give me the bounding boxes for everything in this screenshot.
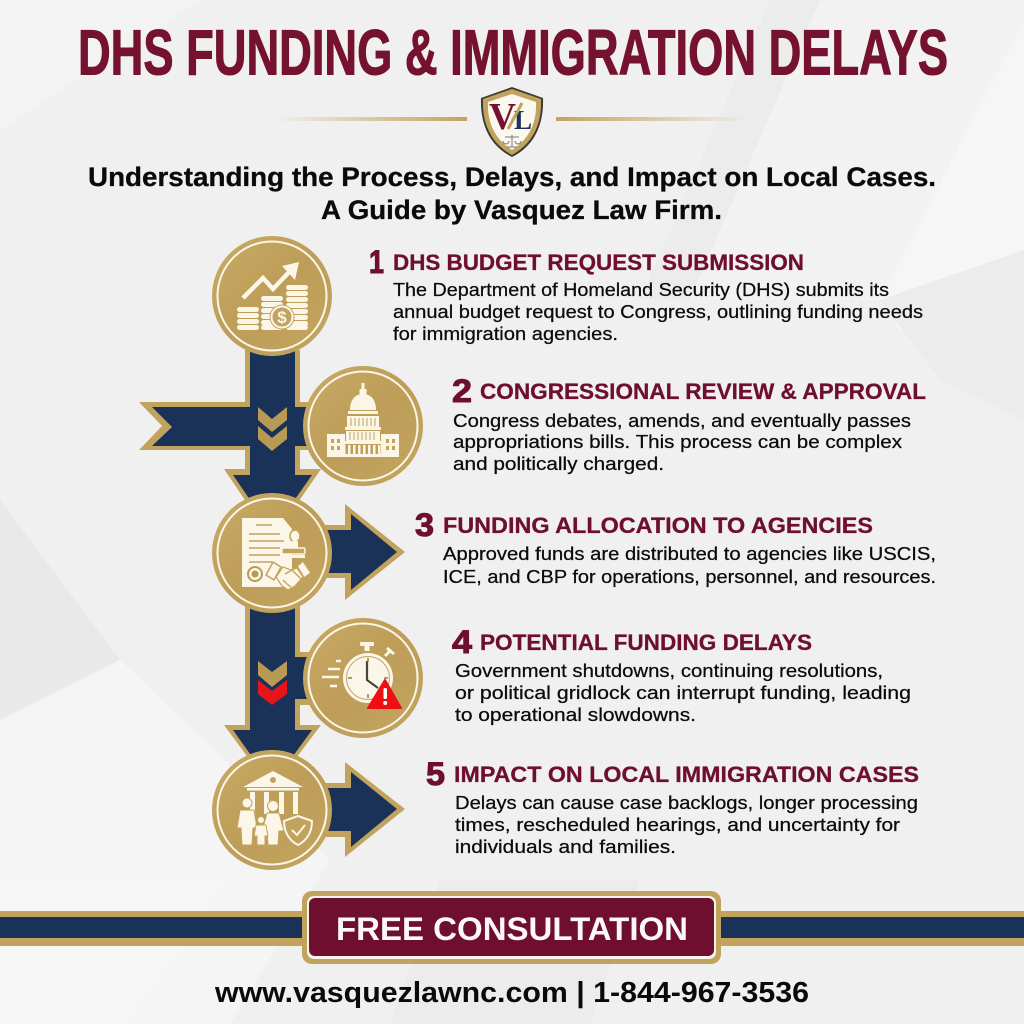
step 3: FUNDING ALLOCATION TO AGENCIES (443, 513, 873, 538)
step 4: 4 (452, 624, 472, 660)
step 5: Delays can cause case backlogs, longer processing (455, 792, 918, 813)
step 2: CONGRESSIONAL REVIEW & APPROVAL (480, 379, 926, 404)
logo divider with shield (272, 87, 750, 157)
footer band (0, 911, 1024, 946)
step 5: times, rescheduled hearings, and uncertainty for (455, 814, 900, 835)
step 5 (426, 756, 919, 857)
subtitle (88, 162, 936, 225)
step 5: 5 (426, 756, 445, 792)
step 4: Government shutdowns, continuing resolutions, (455, 660, 883, 681)
step 3: ICE, and CBP for operations, personnel, and resources. (443, 566, 936, 587)
step 3 (415, 507, 936, 587)
step 3: 3 (415, 507, 434, 543)
icon: courthouse, family and shield (212, 750, 332, 870)
subtitle: Understanding the Process, Delays, and Impact on Local Cases. (88, 162, 936, 192)
step 5: individuals and families. (455, 836, 676, 857)
step 4: POTENTIAL FUNDING DELAYS (480, 630, 812, 655)
step 4: or political gridlock can interrupt funding, leading (455, 682, 911, 703)
contact line: www.vasquezlawnc.com | 1-844-967-3536 (214, 977, 809, 1009)
arrow: step 3 (320, 504, 405, 600)
step 2: Congress debates, amends, and eventually passes (453, 410, 911, 431)
arrow: upper flow with ribbon (139, 350, 321, 540)
step 2: and politically charged. (453, 453, 664, 474)
step 1: 1 (369, 244, 384, 280)
step 4: to operational slowdowns. (455, 704, 696, 725)
subtitle: A Guide by Vasquez Law Firm. (321, 195, 722, 225)
step 1: for immigration agencies. (393, 323, 618, 344)
arrow: step 5 (320, 762, 405, 857)
step 2: appropriations bills. This process can be complex (453, 431, 903, 452)
icon: capitol building (303, 366, 423, 486)
step 2 (452, 373, 926, 474)
step 1: The Department of Homeland Security (DHS) submits its (393, 279, 889, 300)
icon: budget growth coins (212, 236, 332, 356)
step 4 (452, 624, 911, 725)
free consultation button (302, 891, 721, 964)
step 2: 2 (452, 373, 472, 409)
step 5: IMPACT ON LOCAL IMMIGRATION CASES (454, 762, 919, 787)
icon: budget growth coins: $ (277, 308, 287, 327)
logo divider with shield: V (489, 96, 517, 138)
free consultation button: FREE CONSULTATION (336, 911, 688, 947)
step 1 (369, 244, 923, 344)
arrow: lower flow (224, 605, 321, 790)
icon: stopwatch with warning (303, 618, 423, 738)
step 1: DHS BUDGET REQUEST SUBMISSION (393, 250, 804, 275)
step 1: annual budget request to Congress, outlining funding needs (393, 301, 923, 322)
logo divider with shield: L (514, 105, 532, 135)
step 3: Approved funds are distributed to agencies like USCIS, (443, 543, 936, 564)
icon: document, stamp and handshake (212, 493, 332, 613)
